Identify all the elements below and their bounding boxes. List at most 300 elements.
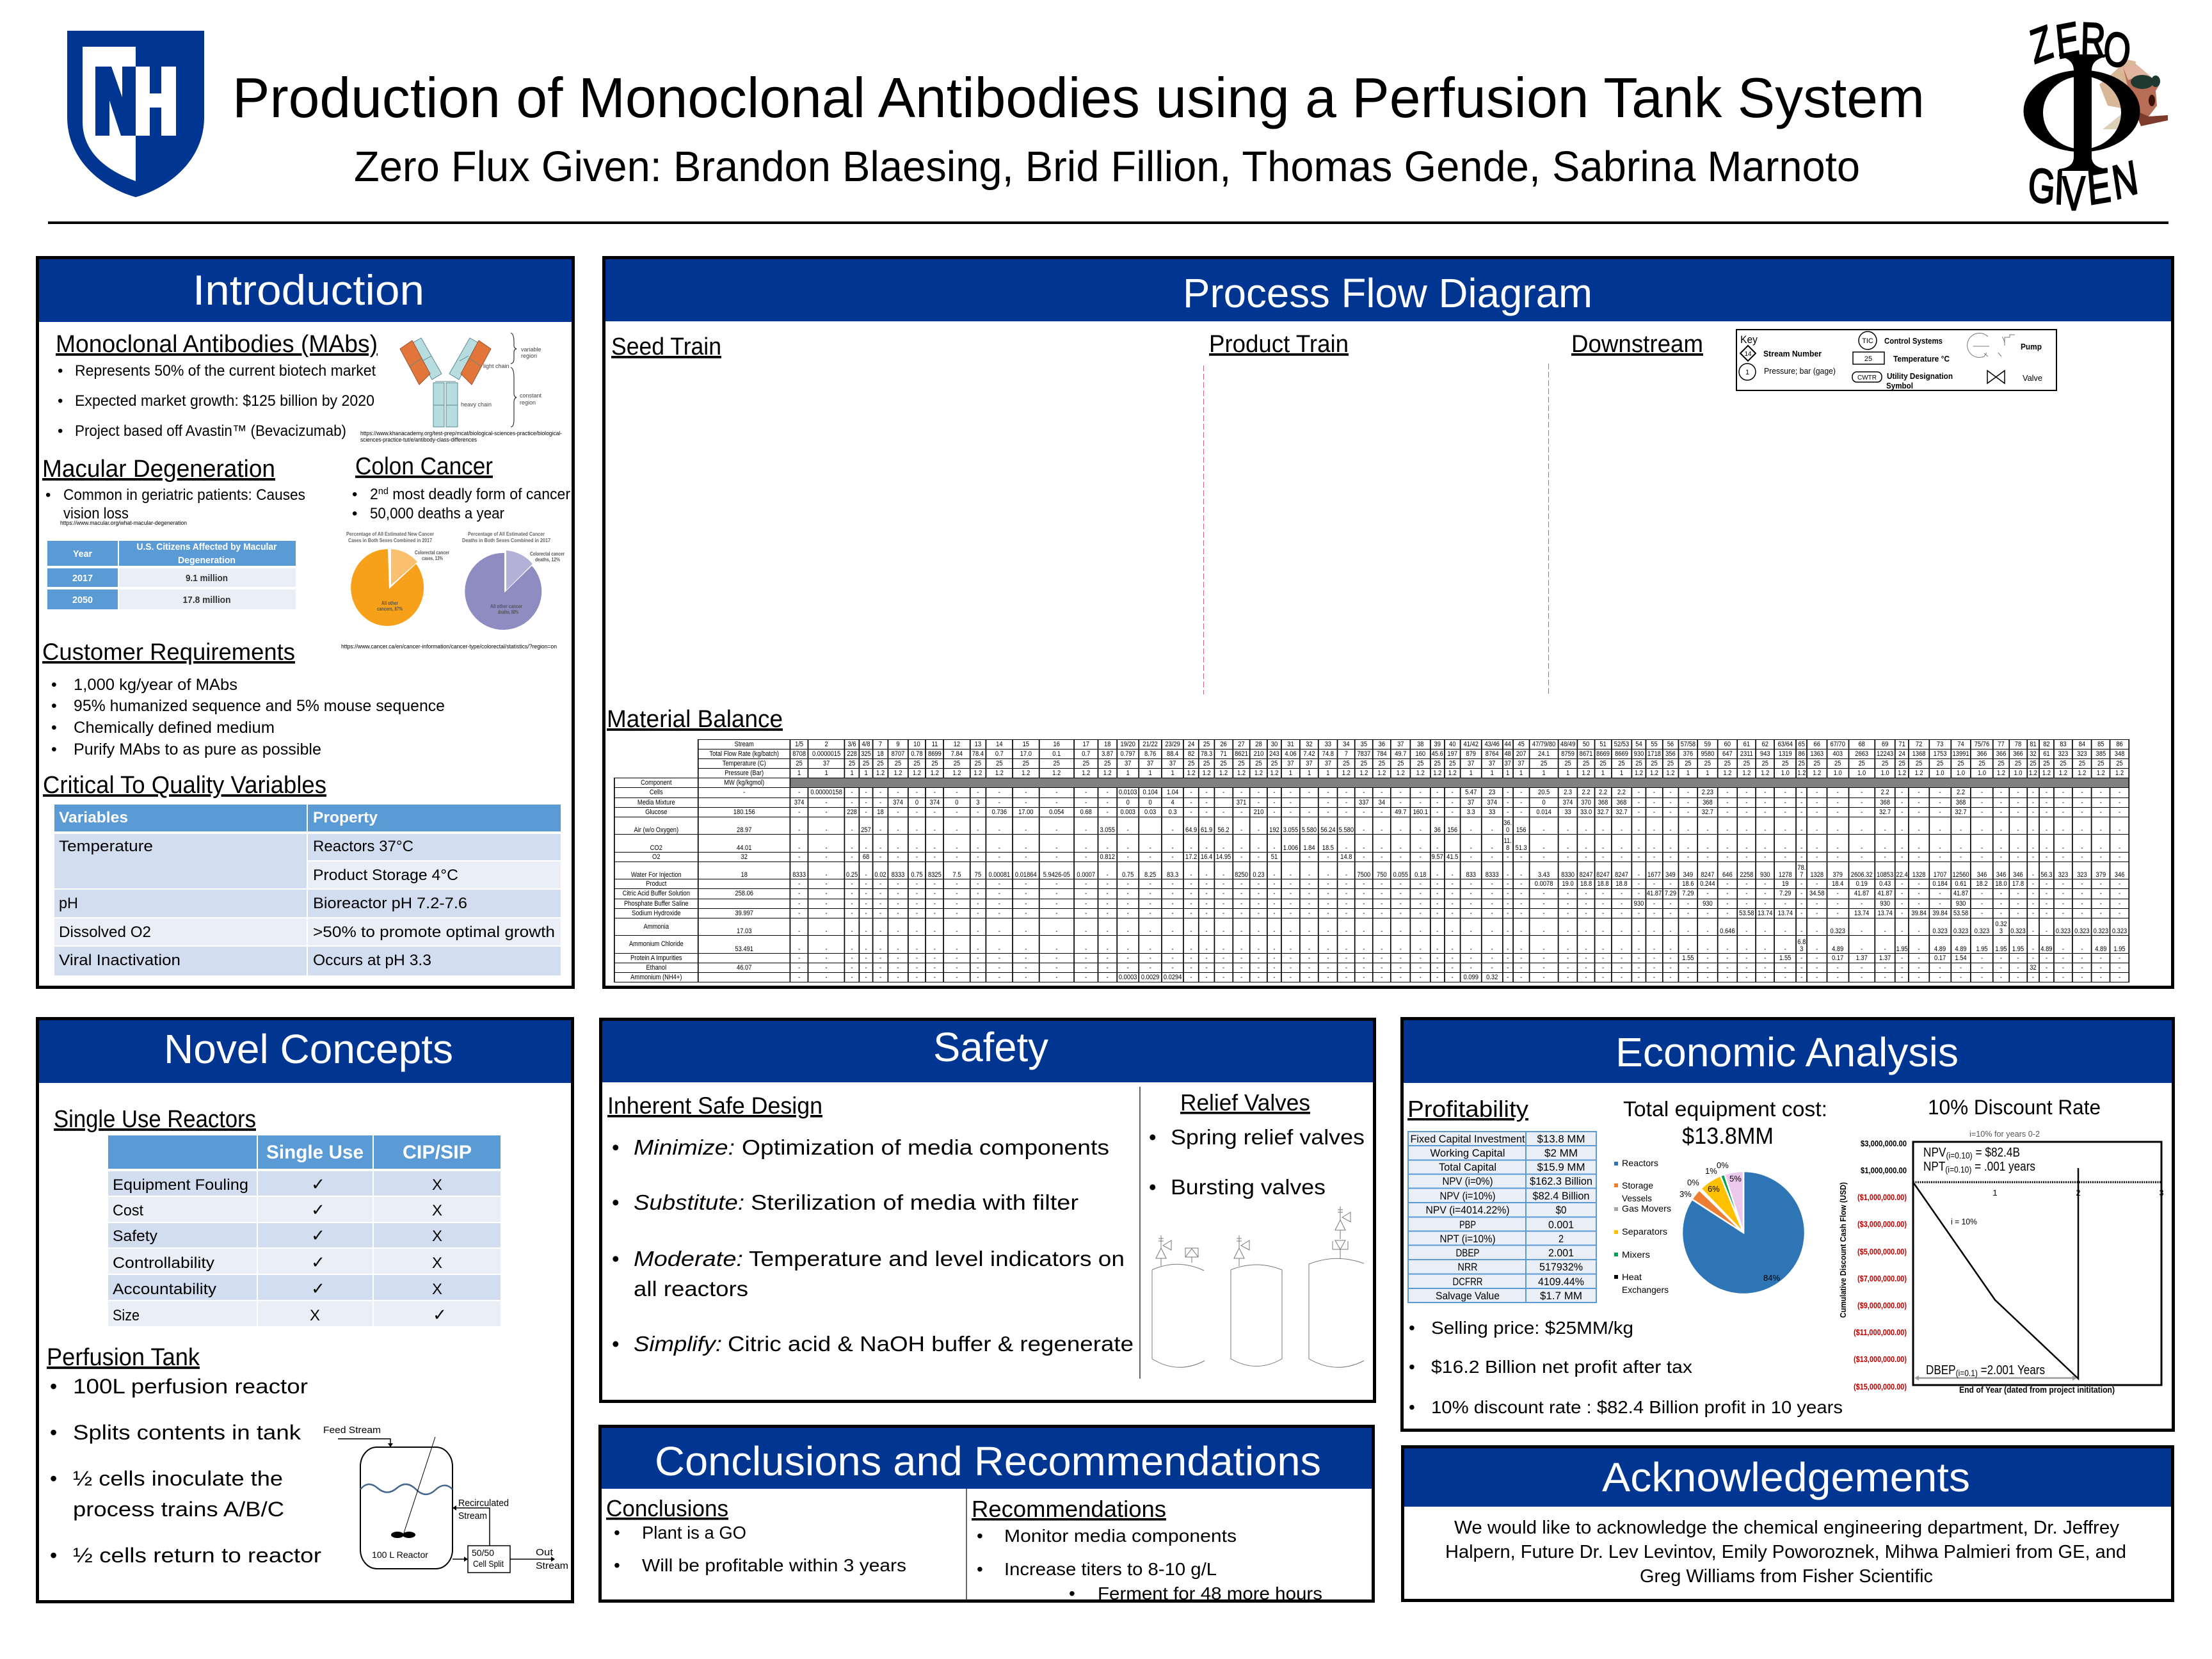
table: material balance: - — [2100, 954, 2102, 961]
table: material balance: - — [998, 799, 1000, 806]
text block: recommendations: • — [977, 1559, 983, 1579]
table: material balance: - — [1400, 799, 1402, 806]
table: material balance: - — [934, 879, 936, 887]
table: material balance: 88.4 — [1167, 750, 1178, 758]
table: material balance: 13.74 — [1854, 909, 1869, 917]
table: material balance: 45.6 — [1432, 750, 1443, 758]
table: material balance: - — [879, 826, 881, 834]
table: material balance: 35 — [1361, 740, 1367, 748]
table: material balance: - — [1939, 789, 1941, 796]
table: material balance: 37 — [1468, 799, 1474, 806]
text block: colon cancer — [352, 453, 570, 522]
table: single use vs CIP/SIP: ✓ — [311, 1226, 325, 1246]
panel: economic analysis — [1402, 1019, 2174, 1430]
table: material balance: - — [934, 853, 936, 860]
table: material balance: - — [998, 964, 1000, 972]
table: material balance: - — [1764, 799, 1766, 806]
table: material balance: 0.736 — [992, 808, 1007, 815]
text block: macular degeneration: https://www.macular.org/what-macular-degeneration — [60, 520, 187, 526]
table: material balance: - — [2119, 799, 2120, 806]
chart: equipment cost pie: 1% — [1705, 1166, 1717, 1176]
table: material balance: 16.4 — [1201, 853, 1212, 860]
table: material balance: 37 — [1518, 759, 1525, 767]
table: material balance: - — [1055, 879, 1057, 887]
table: material balance: 337 — [1359, 799, 1369, 806]
table: single use vs CIP/SIP — [108, 1135, 501, 1326]
table: material balance: - — [1507, 945, 1509, 953]
table: material balance: - — [1172, 927, 1174, 935]
table: material balance: 1.2 — [1219, 769, 1228, 777]
table: material balance: - — [2017, 799, 2019, 806]
table: material balance: 4.89 — [2095, 945, 2106, 953]
icon: Zero Flux Given team logo — [2024, 12, 2168, 220]
table: material balance: - — [1436, 844, 1438, 852]
table: material balance: - — [1240, 973, 1242, 981]
table: material balance: - — [2119, 853, 2120, 860]
table: material balance: 1.37 — [1856, 954, 1868, 961]
table: material balance: - — [2081, 879, 2083, 887]
table: material balance: - — [977, 789, 979, 796]
table: material balance: - — [1918, 964, 1920, 972]
table: material balance: - — [2062, 900, 2064, 908]
table: material balance: - — [916, 789, 918, 796]
table: material balance: - — [1567, 826, 1569, 834]
table: material balance: - — [2017, 808, 2019, 815]
table: material balance: - — [1543, 909, 1545, 917]
table: material balance: - — [1258, 853, 1260, 860]
table: material balance: 349 — [1665, 871, 1676, 879]
table: material balance: - — [1327, 964, 1329, 972]
table: material balance: - — [1327, 900, 1329, 908]
table: material balance: - — [956, 789, 958, 796]
table: material balance: 4/8 — [862, 740, 870, 748]
table: material balance: - — [998, 954, 1000, 961]
table: material balance: - — [1918, 808, 1920, 815]
table: material balance: - — [1222, 808, 1224, 815]
table: critical to quality variables: Product Storage 4°C — [313, 867, 458, 884]
table: material balance: 8247 — [1701, 871, 1714, 879]
table: material balance: 26 — [1220, 740, 1227, 748]
table: material balance: - — [879, 853, 881, 860]
table: material balance: 0.244 — [1700, 879, 1715, 887]
table: material balance: 7 — [1345, 750, 1348, 758]
table: material balance: - — [977, 945, 979, 953]
table: material balance: - — [1621, 900, 1623, 908]
table: material balance: Media Mixture — [637, 799, 675, 806]
table: material balance: - — [1816, 879, 1818, 887]
table: material balance: - — [1784, 826, 1786, 834]
table: material balance: - — [1025, 890, 1027, 897]
table: material balance: - — [956, 900, 958, 908]
table: material balance: - — [1706, 973, 1708, 981]
table: material balance: - — [2032, 927, 2034, 935]
table: material balance: 370 — [1581, 799, 1591, 806]
table: material balance: - — [1258, 799, 1260, 806]
table: material balance: 1.2 — [2042, 769, 2051, 777]
table: material balance: 48 — [1504, 750, 1511, 758]
table: material balance: - — [1345, 879, 1347, 887]
chart: equipment cost pie: 84% — [1763, 1273, 1780, 1283]
table: material balance: - — [1861, 808, 1863, 815]
table: material balance: 65 — [1799, 740, 1805, 748]
table: material balance: - — [2081, 945, 2083, 953]
table: material balance: - — [1055, 945, 1057, 953]
table: material balance: - — [897, 973, 899, 981]
table: material balance: - — [1240, 844, 1242, 852]
table: material balance: - — [1687, 927, 1689, 935]
chart: equipment cost pie — [1614, 1158, 1805, 1295]
table: material balance: 25 — [954, 759, 960, 767]
table: material balance: 13.74 — [1758, 909, 1773, 917]
table: material balance: - — [1190, 871, 1192, 879]
table: material balance: - — [1939, 973, 1941, 981]
table: material balance: - — [1107, 964, 1109, 972]
table: material balance: - — [977, 890, 979, 897]
table: material balance: - — [1258, 900, 1260, 908]
table: material balance: - — [1669, 973, 1671, 981]
table: material balance: - — [1491, 927, 1493, 935]
text block: recommendations: Recommendations — [972, 1496, 1166, 1522]
chart heading: total equipment cost: $13.8MM — [1682, 1123, 1774, 1149]
text block: relief valves — [1149, 1089, 1365, 1199]
table: material balance: 25 — [1998, 759, 2005, 767]
table: material balance: - — [1491, 964, 1493, 972]
table: single use vs CIP/SIP: Single Use — [266, 1142, 364, 1163]
table: material balance: - — [1420, 909, 1422, 917]
table: material balance: - — [1172, 964, 1174, 972]
table: material balance: 13.74 — [1778, 909, 1793, 917]
table: material balance: 32.7 — [1615, 808, 1628, 815]
table: material balance: 78 — [2015, 740, 2021, 748]
chart: equipment cost pie: 0% — [1717, 1160, 1729, 1170]
table: material balance: - — [1452, 871, 1454, 879]
table: material balance: 18.8 — [1615, 879, 1628, 887]
chart: equipment cost pie: Gas Movers — [1622, 1203, 1671, 1214]
table: profitability metrics: $2 MM — [1544, 1147, 1578, 1159]
table: material balance: - — [2062, 890, 2064, 897]
legend: key: Control Systems — [1884, 336, 1943, 346]
table: material balance: - — [879, 954, 881, 961]
table: material balance: - — [798, 954, 800, 961]
table: material balance: - — [1222, 789, 1224, 796]
table: material balance: - — [1400, 826, 1402, 834]
table: material balance: 83 — [2060, 740, 2067, 748]
table: material balance: 1.2 — [1082, 769, 1090, 777]
table: material balance: - — [998, 927, 1000, 935]
table: material balance: 2.2 — [1599, 789, 1607, 796]
icon: antibody structure diagram: region — [520, 399, 536, 406]
table: material balance: - — [1567, 973, 1569, 981]
table: material balance: 25 — [1271, 759, 1278, 767]
table: material balance: - — [1520, 909, 1522, 917]
table: critical to quality variables: Dissolved O2 — [59, 924, 151, 941]
table: material balance: - — [1400, 964, 1402, 972]
table: material balance: 368 — [1598, 799, 1608, 806]
table: material balance: - — [1567, 954, 1569, 961]
table: material balance: - — [1706, 909, 1708, 917]
table: material balance: - — [1150, 900, 1151, 908]
table: material balance: - — [2081, 789, 2083, 796]
table: material balance: - — [798, 853, 800, 860]
table: material balance: - — [2081, 826, 2083, 834]
table: material balance: - — [1816, 964, 1818, 972]
table: material balance: 1718 — [1647, 750, 1661, 758]
table: material balance: - — [1981, 973, 1983, 981]
panel: acknowledgements — [1403, 1447, 2172, 1600]
table: material balance: 228 — [847, 808, 857, 815]
table: material balance: - — [1085, 879, 1087, 887]
table: material balance: - — [1621, 954, 1623, 961]
table: citizens affected by macular degeneration: U.S. Citizens Affected by Macular — [137, 541, 277, 552]
table: single use vs CIP/SIP: ✓ — [311, 1175, 325, 1194]
table: material balance: 1328 — [1810, 871, 1823, 879]
table: material balance: - — [2081, 799, 2083, 806]
chart: cumulative discount cash flow: ($11,000,000.00) — [1854, 1328, 1907, 1337]
table: material balance: - — [879, 789, 881, 796]
table: material balance: 1677 — [1647, 871, 1661, 879]
table: profitability metrics: 4109.44% — [1538, 1276, 1584, 1288]
table: material balance: 25 — [1635, 759, 1642, 767]
table: material balance: 25 — [996, 759, 1003, 767]
table: material balance: - — [1420, 890, 1422, 897]
table: single use vs CIP/SIP: X — [432, 1254, 442, 1272]
table: material balance: 1.2 — [1666, 769, 1674, 777]
title: Production of Monoclonal Antibodies using a Perfusion Tank System — [232, 66, 1925, 129]
table: material balance: - — [1273, 945, 1276, 953]
table: material balance: 346 — [1977, 871, 1987, 879]
table: material balance: 41.87 — [1953, 890, 1968, 897]
table: material balance: 41.87 — [1854, 890, 1869, 897]
table: material balance: - — [1055, 799, 1057, 806]
table: material balance: 25 — [1957, 759, 1964, 767]
table: material balance: 1.2 — [1997, 769, 2005, 777]
table: material balance: 1.2 — [1022, 769, 1030, 777]
text block: monoclonal antibodies: • — [58, 422, 63, 440]
table: material balance: 1.2 — [2097, 769, 2105, 777]
table: material balance: - — [1055, 909, 1057, 917]
table: material balance: - — [1420, 799, 1422, 806]
table: material balance: - — [1273, 844, 1276, 852]
table: material balance: - — [916, 879, 918, 887]
table: profitability metrics: Total Capital — [1439, 1161, 1496, 1173]
table: material balance: 1.95 — [1896, 945, 1908, 953]
table: single use vs CIP/SIP: Size — [113, 1307, 140, 1324]
table: material balance: - — [1726, 879, 1728, 887]
table: material balance: 0.17 — [1832, 954, 1843, 961]
table: material balance: - — [2000, 853, 2002, 860]
table: material balance: 376 — [1683, 750, 1693, 758]
table: material balance: - — [897, 909, 899, 917]
text block: inherent safe design: Moderate: — [634, 1247, 743, 1270]
table: material balance: 9.57 — [1432, 853, 1443, 860]
table: material balance: - — [1764, 900, 1766, 908]
table: material balance: - — [1638, 909, 1640, 917]
chart: cumulative discount cash flow: =2.001 Years — [1978, 1363, 2045, 1377]
table: material balance: 18.6 — [1682, 879, 1694, 887]
table: material balance: 2.3 — [1564, 789, 1572, 796]
table: material balance: 1.84 — [1303, 844, 1315, 852]
table: critical to quality variables: Bioreactor pH 7.2-7.6 — [313, 895, 467, 912]
table: material balance: - — [851, 909, 853, 917]
table: material balance: - — [1764, 789, 1766, 796]
table: material balance: - — [1602, 844, 1604, 852]
table: material balance: - — [2046, 853, 2048, 860]
table: material balance: 1.95 — [1995, 945, 2007, 953]
legend: key: Valve — [2023, 373, 2042, 383]
table: material balance: - — [1150, 853, 1151, 860]
chart: new cancer cases pie: cancers, 87% — [377, 606, 403, 612]
table: material balance: - — [1784, 799, 1786, 806]
table: material balance: - — [1345, 909, 1347, 917]
table: material balance: 156 — [1447, 826, 1457, 834]
table: material balance: - — [1363, 844, 1365, 852]
table: material balance: 833 — [1466, 871, 1476, 879]
chart: equipment cost pie: 3% — [1679, 1189, 1692, 1199]
table: material balance: - — [1085, 844, 1087, 852]
table: material balance: - — [2000, 826, 2002, 834]
table: material balance: 1.006 — [1283, 844, 1298, 852]
table: material balance: - — [1784, 973, 1786, 981]
table: material balance: - — [2062, 945, 2064, 953]
table: material balance: - — [1520, 879, 1522, 887]
table: material balance: - — [1172, 826, 1174, 834]
table: single use vs CIP/SIP: X — [310, 1307, 320, 1324]
table: material balance: - — [1687, 909, 1689, 917]
table: material balance: - — [1085, 799, 1087, 806]
table: material balance: 7837 — [1357, 750, 1370, 758]
table: profitability metrics: PBP — [1459, 1219, 1476, 1231]
table: material balance: 18.2 — [1976, 879, 1988, 887]
table: material balance: - — [1653, 973, 1655, 981]
table: citizens affected by macular degeneration: Year — [73, 549, 92, 559]
table: material balance: - — [1638, 871, 1640, 879]
legend: key: Key — [1740, 333, 1758, 346]
table: material balance: - — [1621, 973, 1623, 981]
table: material balance: - — [1621, 826, 1623, 834]
table: material balance: - — [1308, 973, 1310, 981]
table: material balance: - — [1745, 789, 1747, 796]
table: material balance: 1.2 — [1915, 769, 1923, 777]
table: material balance: 2663 — [1855, 750, 1868, 758]
table: material balance: - — [798, 890, 800, 897]
chart: equipment cost pie: Mixers — [1622, 1249, 1650, 1260]
table: material balance: 1.2 — [995, 769, 1004, 777]
icon: perfusion reactor diagram: 50/50 — [472, 1548, 494, 1558]
table: material balance: - — [1901, 808, 1903, 815]
table: material balance: - — [1602, 973, 1604, 981]
table: material balance: 1707 — [1934, 871, 1946, 879]
text block: economic bullets: $16.2 Billion net profit after tax — [1431, 1357, 1692, 1377]
table: material balance: - — [1222, 879, 1224, 887]
table: material balance: 2258 — [1740, 871, 1753, 879]
chart: cumulative discount cash flow: 1 — [1992, 1188, 1998, 1198]
table: material balance: - — [2100, 853, 2102, 860]
table: material balance: - — [916, 927, 918, 935]
table: material balance: 53.58 — [1953, 909, 1968, 917]
table: material balance: - — [2119, 808, 2120, 815]
table: material balance: 41.87 — [1877, 890, 1893, 897]
icon: antibody structure diagram: constant — [520, 392, 542, 399]
table: material balance: - — [1273, 927, 1276, 935]
chart: equipment cost pie: 5% — [1729, 1174, 1742, 1183]
text: cancer source: https://www.cancer.ca/en/cancer-information/cancer-type/colorectal/statistics/?region=on — [341, 643, 557, 650]
table: material balance: - — [2017, 909, 2019, 917]
table: material balance: - — [1653, 799, 1655, 806]
table: material balance: - — [897, 844, 899, 852]
table: material balance: 0.323 — [1975, 927, 1989, 935]
table: material balance: 25 — [1203, 759, 1210, 767]
table: material balance: - — [2062, 799, 2064, 806]
text block: monoclonal antibodies: Expected market growth: $125 billion by 2020 — [75, 392, 374, 410]
table: material balance: - — [1638, 879, 1640, 887]
table: material balance: - — [1687, 844, 1689, 852]
panel: novel concepts — [37, 1019, 572, 1601]
text block: customer requirements: 1,000 kg/year of MAbs — [74, 676, 237, 694]
table: material balance: 49.7 — [1395, 808, 1406, 815]
table: material balance: 1 — [1566, 769, 1569, 777]
text block: customer requirements: • — [51, 719, 57, 737]
table: material balance: - — [865, 871, 867, 879]
table: material balance: - — [1960, 826, 1962, 834]
table: material balance: - — [1745, 879, 1747, 887]
table: material balance: 0 — [915, 799, 918, 806]
table: material balance: - — [1981, 964, 1983, 972]
table: material balance: - — [1363, 973, 1365, 981]
legend: key: 25 — [1864, 355, 1872, 363]
table: material balance: 33 — [1564, 808, 1571, 815]
table: material balance: - — [826, 826, 828, 834]
table: profitability metrics: 2 — [1559, 1233, 1564, 1245]
table: material balance: 0.3 — [1169, 808, 1177, 815]
table: material balance: Glucose — [645, 808, 667, 815]
table: material balance: 8707 — [892, 750, 904, 758]
table: material balance: - — [1107, 954, 1109, 961]
table: material balance: 19.0 — [1562, 879, 1574, 887]
table: material balance: - — [1085, 789, 1087, 796]
table: material balance: 57/58 — [1681, 740, 1695, 748]
table: profitability metrics: Working Capital — [1430, 1147, 1505, 1159]
table: material balance: - — [1800, 927, 1802, 935]
table: material balance: - — [1206, 909, 1208, 917]
table: material balance: - — [851, 879, 853, 887]
table: material balance: - — [1470, 879, 1472, 887]
table: material balance: - — [1222, 900, 1224, 908]
table: material balance: 25 — [913, 759, 920, 767]
table: material balance: 1.0 — [1881, 769, 1889, 777]
table: material balance: - — [1381, 945, 1382, 953]
table: material balance: - — [1190, 973, 1192, 981]
table: material balance: - — [1290, 973, 1292, 981]
table: material balance: 930 — [1703, 900, 1713, 908]
icon: perfusion reactor diagram: Stream — [458, 1511, 487, 1521]
table: material balance: - — [851, 900, 853, 908]
panel: conclusions and recommendations — [600, 1426, 1374, 1603]
table: material balance: - — [998, 909, 1000, 917]
table: material balance: 7.84 — [951, 750, 963, 758]
table: citizens affected by macular degeneration — [47, 541, 296, 609]
legend: key: Pump — [2021, 342, 2042, 351]
table: material balance: - — [2062, 789, 2064, 796]
table: material balance: - — [1127, 826, 1129, 834]
table: material balance: 7.29 — [1682, 890, 1694, 897]
table: material balance: 1.2 — [2059, 769, 2067, 777]
table: material balance: - — [977, 954, 979, 961]
table: material balance: - — [934, 900, 936, 908]
icon: reactor relief valves — [1152, 1206, 1364, 1367]
table: material balance: - — [1327, 879, 1329, 887]
table: material balance: - — [1520, 871, 1522, 879]
table: material balance: 25 — [2015, 759, 2021, 767]
